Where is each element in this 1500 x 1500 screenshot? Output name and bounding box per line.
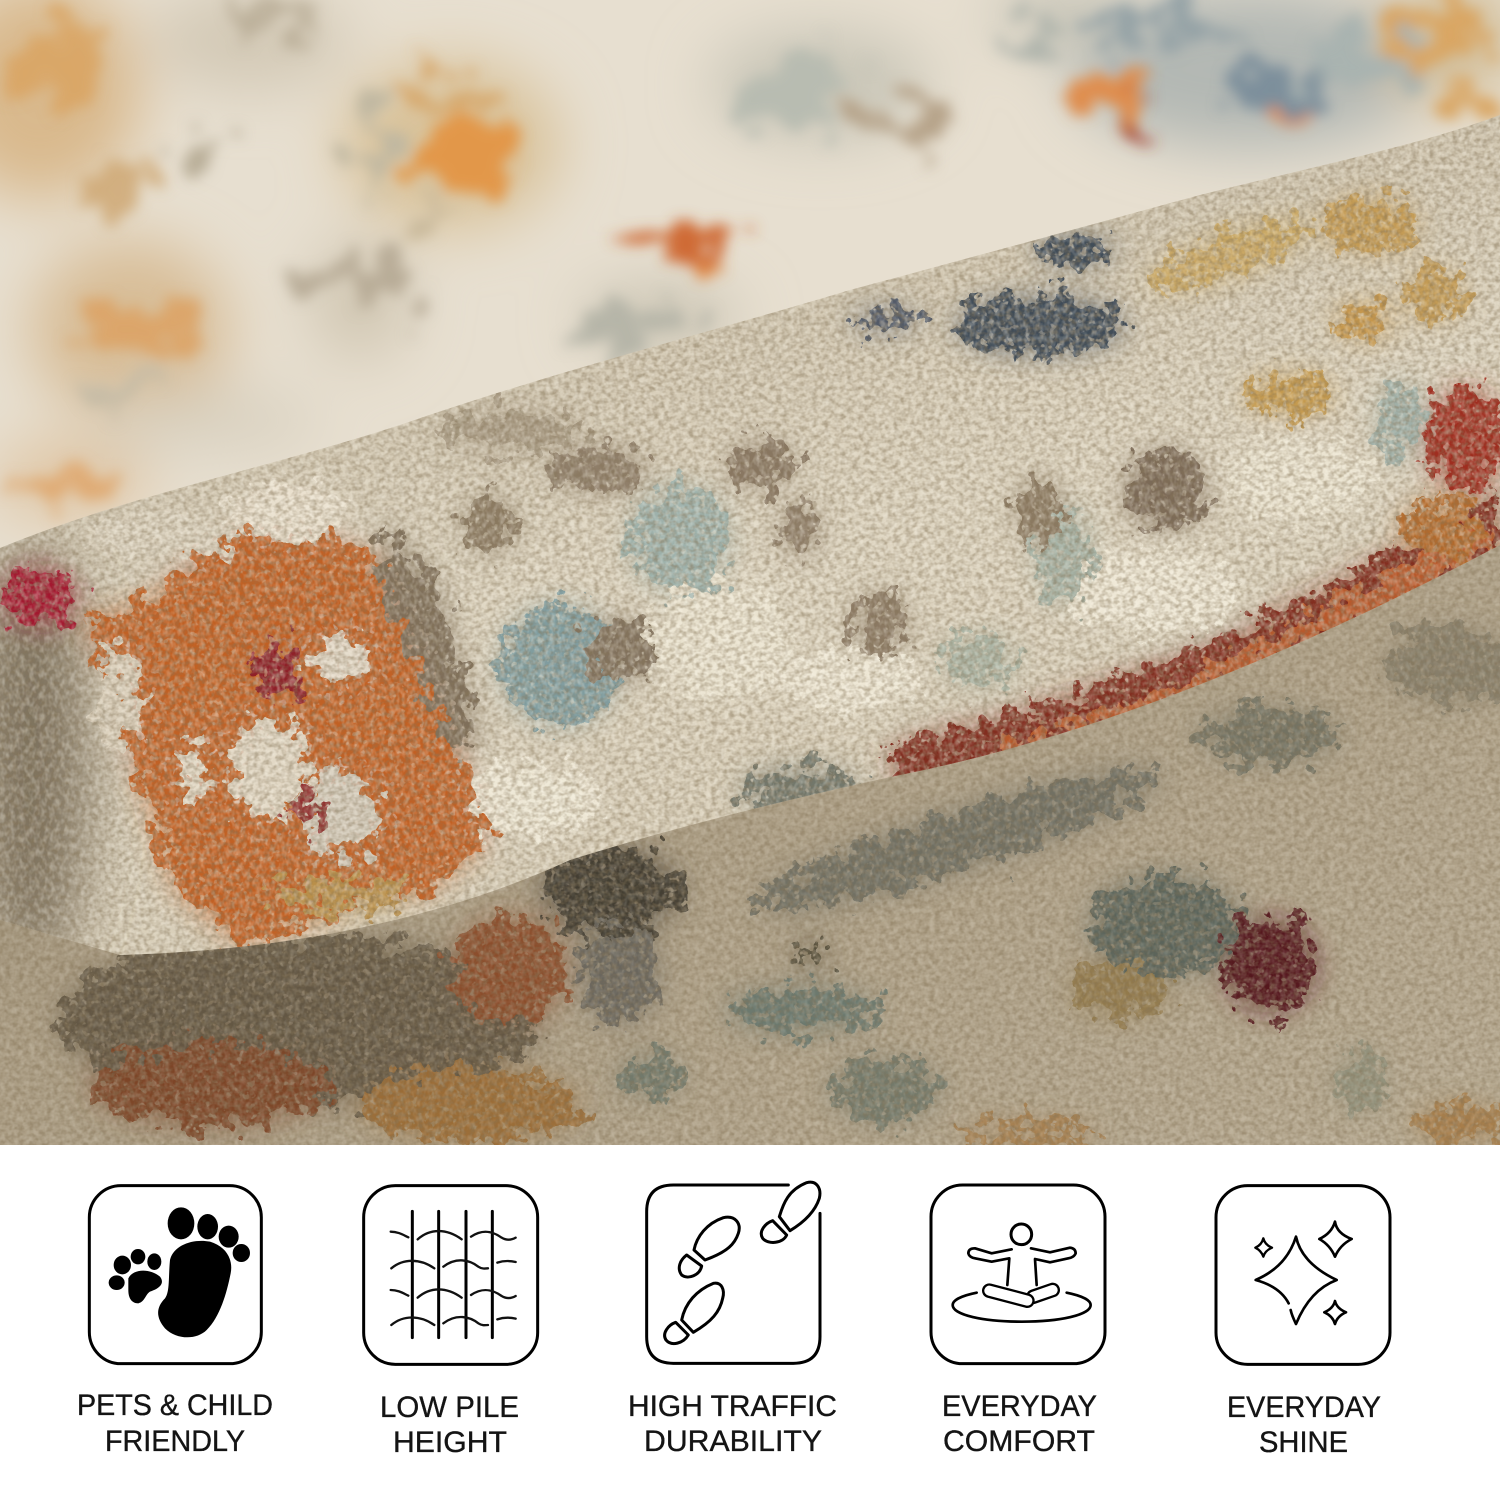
label: everyday comfort: EVERYDAY [942,1390,1097,1423]
icon: sparkles [1216,1186,1390,1364]
fabric texture overlay [0,116,1500,955]
lower rug surface [0,200,1500,1147]
feature: low pile height [364,1186,538,1459]
label: low pile height: HEIGHT [393,1426,507,1459]
icon: footprints [647,1182,820,1363]
label: everyday shine [1227,1391,1381,1459]
icon: paw and foot [89,1186,261,1364]
label: high traffic durability: HIGH TRAFFIC [628,1390,837,1423]
feature: everyday shine [1216,1186,1390,1459]
label: high traffic durability [628,1390,837,1458]
label: pets and child friendly [77,1389,273,1458]
label: low pile height [380,1391,519,1459]
label: everyday shine: EVERYDAY [1227,1391,1381,1424]
label: pets and child friendly: FRIENDLY [105,1425,245,1458]
background: blurred rug pattern [0,0,1500,700]
label: everyday comfort [942,1390,1097,1458]
label: everyday comfort: COMFORT [943,1425,1095,1458]
feature: pets and child friendly [77,1186,273,1458]
label: high traffic durability: DURABILITY [644,1425,822,1458]
icon: woven pile grid [364,1186,538,1364]
icon strip: product features [77,1180,1392,1459]
icon: person meditating on rug [931,1185,1105,1364]
feature: high traffic durability [628,1182,837,1458]
label: pets and child friendly: PETS & CHILD [77,1389,273,1422]
label: low pile height: LOW PILE [380,1391,519,1424]
feature: everyday comfort [931,1185,1105,1458]
rolled rug edge with motifs [0,115,1500,955]
label: everyday shine: SHINE [1259,1426,1348,1459]
